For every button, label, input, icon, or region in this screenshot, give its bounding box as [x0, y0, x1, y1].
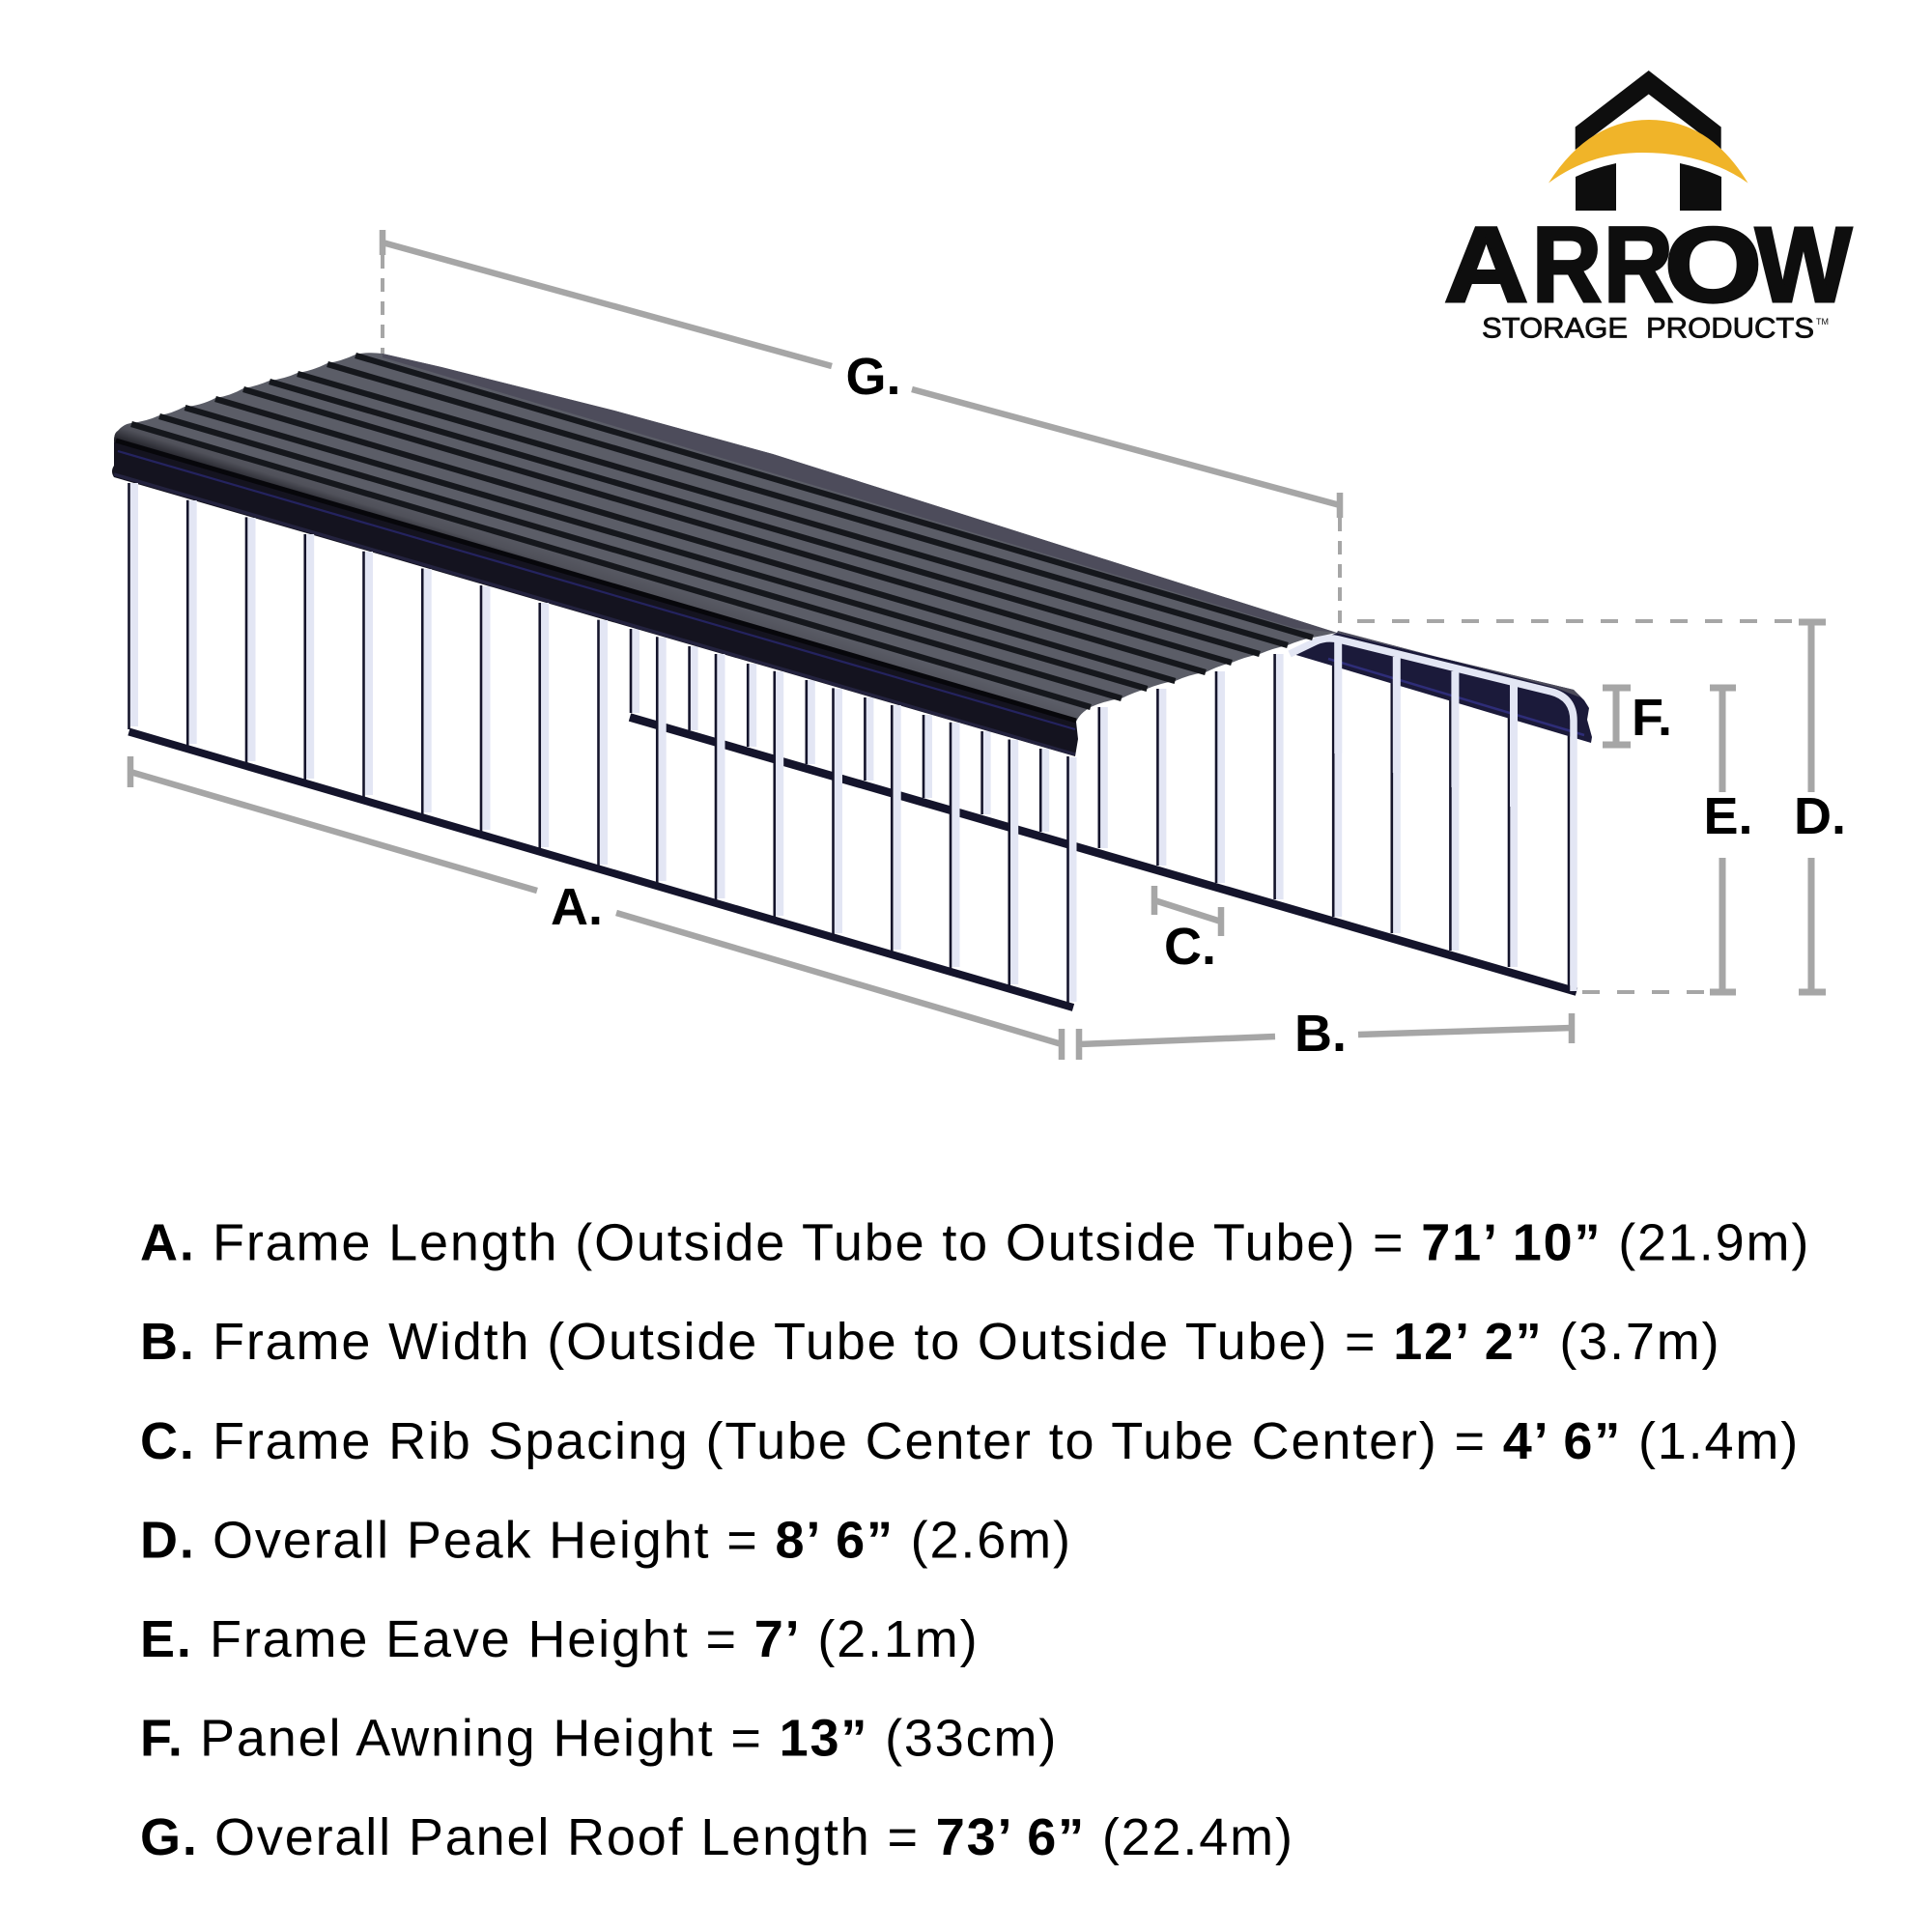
row C: C. — [140, 1412, 196, 1470]
row F: Panel Awning Height = — [200, 1710, 780, 1768]
B line — [1079, 1013, 1572, 1060]
logo wordmark: R — [1604, 206, 1673, 325]
icon: yellow arc — [1548, 120, 1748, 184]
roof eave shading — [114, 423, 1091, 722]
row B: B. — [140, 1313, 196, 1371]
A label: A. — [551, 878, 603, 936]
E line — [1710, 688, 1736, 992]
dimension C — [1154, 886, 1221, 976]
D label: D. — [1794, 787, 1846, 845]
logo wordmark: A — [1444, 206, 1528, 325]
row E: Frame Eave Height = — [210, 1610, 754, 1668]
roof far strip — [383, 354, 1337, 633]
logo: Arrow Storage Products — [1444, 71, 1852, 344]
row C: 4’ 6” (1.4m) — [1503, 1412, 1800, 1470]
row A: A. — [140, 1213, 196, 1271]
logo trademark: TM — [1816, 317, 1829, 327]
far post tubes over fascia — [1338, 641, 1514, 807]
carport structure — [112, 353, 1592, 1008]
C label: C. — [1164, 918, 1216, 976]
G dashed guides — [383, 255, 1340, 623]
D and E dashed guides — [1357, 621, 1803, 992]
back side post tubes — [631, 629, 1569, 987]
row F: 13” (33cm) — [780, 1710, 1058, 1768]
roof corrugation ribs — [131, 355, 1313, 707]
B label: B. — [1294, 1005, 1347, 1063]
logo wordmark: R — [1532, 206, 1602, 325]
row D: D. — [140, 1511, 196, 1569]
row G: Overall Panel Roof Length = — [214, 1808, 936, 1866]
front fascia lower lip — [114, 474, 1075, 754]
D line — [1799, 622, 1826, 992]
front side rail — [129, 732, 1073, 1008]
row B: 12’ 2” (3.7m) — [1393, 1313, 1720, 1371]
row D: Overall Peak Height = — [213, 1511, 775, 1569]
row F: F. — [140, 1710, 185, 1768]
E label: E. — [1703, 787, 1753, 845]
logo wordmark: O — [1664, 206, 1762, 325]
A line — [130, 756, 1062, 1060]
dimension A — [130, 756, 1062, 1060]
far end fascia highlight — [1328, 659, 1584, 735]
white gaps in back rail behind front posts — [662, 713, 1072, 856]
row A: 71’ 10” (21.9m) — [1421, 1213, 1810, 1271]
dimension D — [1357, 621, 1846, 992]
G label: G. — [845, 348, 901, 406]
F line — [1603, 688, 1631, 745]
dimension B — [1079, 1005, 1572, 1063]
icon: house wall blocks — [1576, 163, 1721, 211]
row E: 7’ (2.1m) — [754, 1610, 979, 1668]
far end arched frame tube — [1290, 639, 1574, 991]
C line — [1154, 886, 1221, 936]
G line — [383, 230, 1340, 518]
front fascia blue line — [118, 451, 1075, 729]
roof surface — [114, 353, 1337, 722]
far roof edge strip — [1337, 631, 1580, 697]
row E: E. — [140, 1610, 193, 1668]
back side rail — [630, 717, 1577, 992]
row C: Frame Rib Spacing (Tube Center to Tube Center) = — [213, 1412, 1503, 1470]
dimension E — [1703, 688, 1753, 992]
row D: 8’ 6” (2.6m) — [775, 1511, 1072, 1569]
logo tagline: STORAGE — [1482, 313, 1628, 344]
logo wordmark: W — [1755, 206, 1852, 325]
far end fascia panel — [1290, 633, 1592, 743]
dimension list — [140, 1213, 1810, 1866]
front side post tubes — [129, 483, 1072, 1004]
row G: 73’ 6” (22.4m) — [936, 1808, 1294, 1866]
logo tagline: PRODUCTS — [1646, 313, 1814, 344]
dimension F — [1603, 688, 1672, 747]
icon: house roof chevron — [1576, 71, 1721, 150]
row B: Frame Width (Outside Tube to Outside Tube) = — [213, 1313, 1393, 1371]
dimension G — [383, 230, 1340, 623]
F label: F. — [1632, 689, 1672, 747]
front fascia — [112, 441, 1078, 756]
front fascia top rim — [116, 440, 1076, 721]
row G: G. — [140, 1808, 199, 1866]
row A: Frame Length (Outside Tube to Outside Tube) = — [213, 1213, 1421, 1271]
